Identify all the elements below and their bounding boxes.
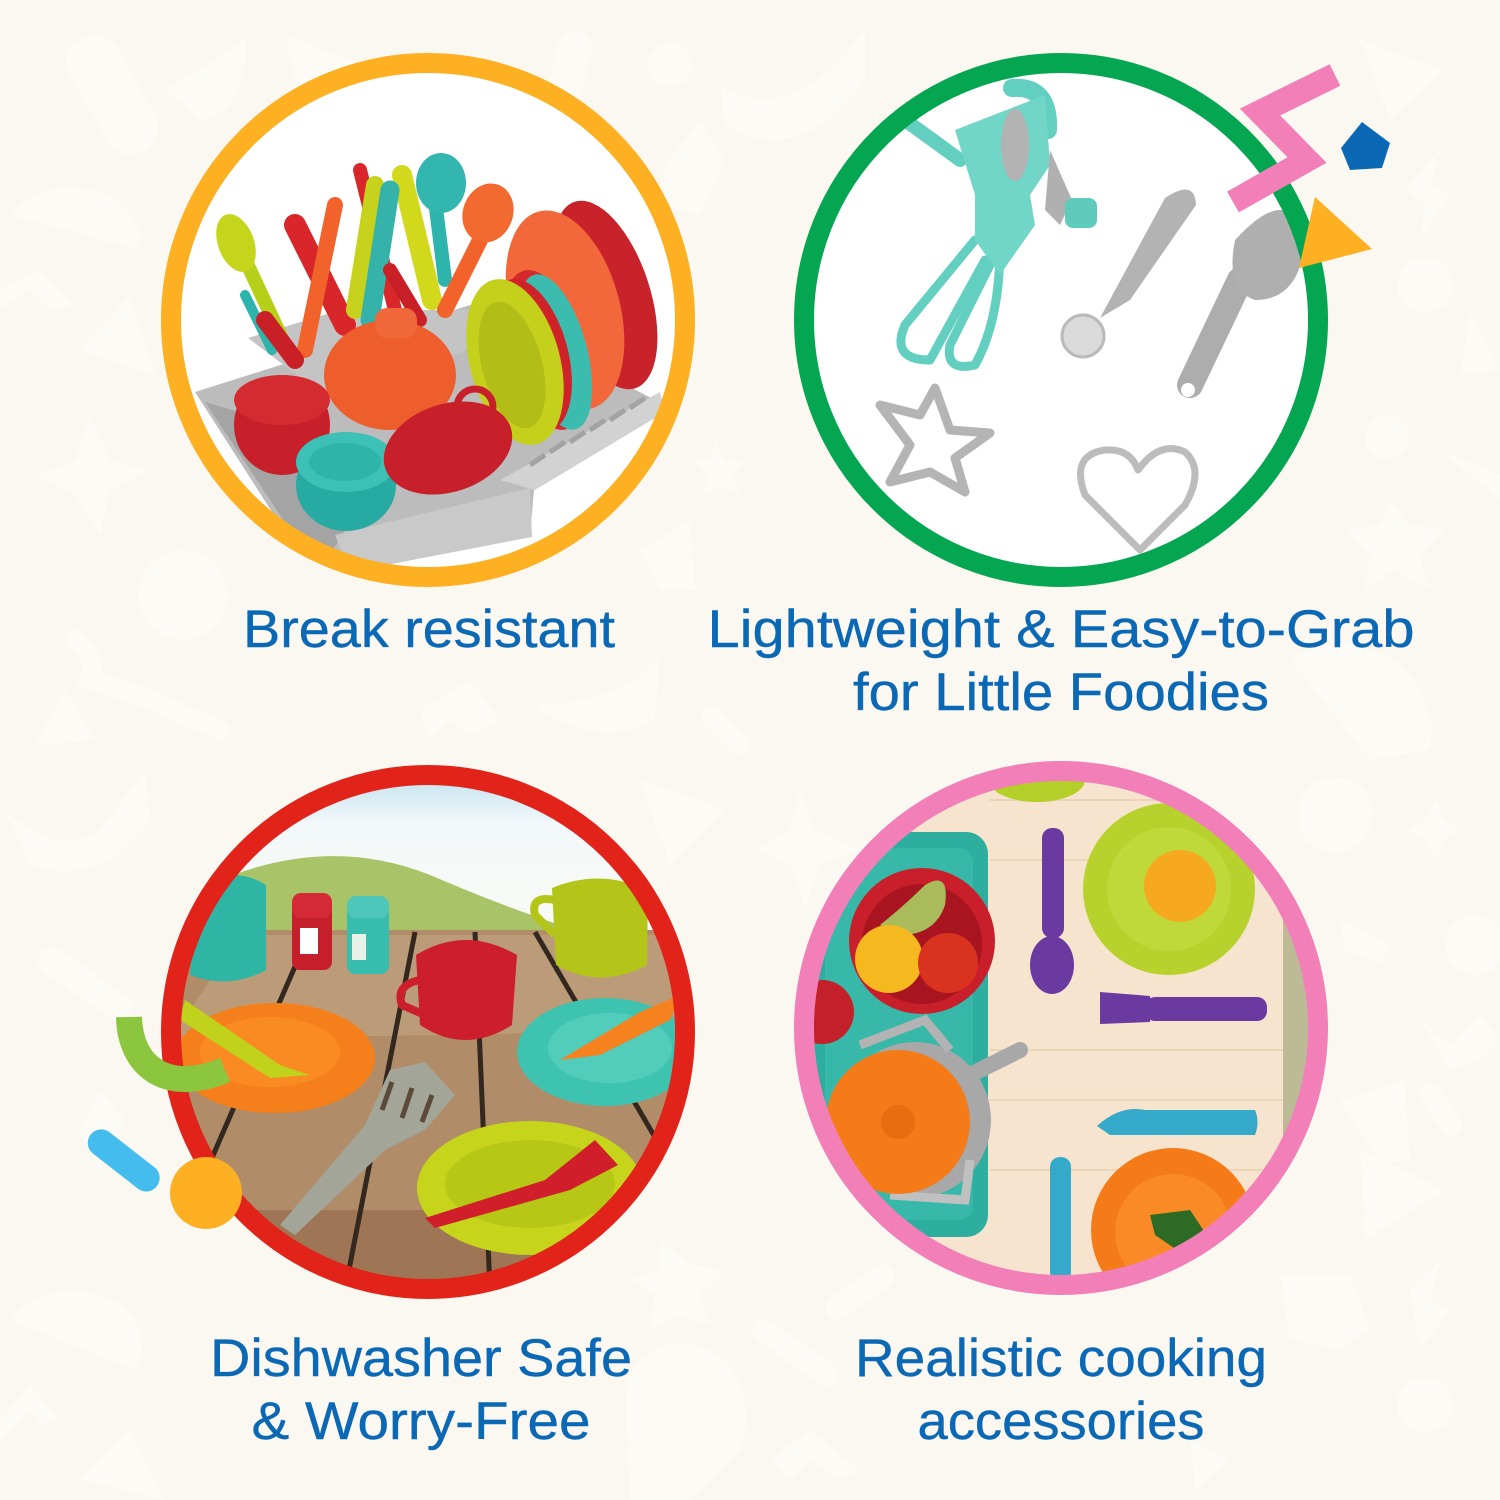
woven mat — [1283, 920, 1308, 1136]
photo: utensils and cookie cutters — [803, 62, 1319, 578]
purple spoon — [1042, 828, 1064, 938]
red mug — [416, 940, 517, 1040]
side bowl — [814, 980, 854, 1044]
spoon — [1190, 280, 1240, 385]
jar — [190, 875, 266, 981]
ring: pink — [804, 771, 1318, 1285]
pot — [874, 1042, 991, 1194]
teal plate — [517, 998, 675, 1106]
photo: dish rack with colourful dishes — [170, 62, 686, 578]
star cutter — [880, 388, 990, 492]
icon: pink zigzag — [1233, 75, 1335, 202]
rack — [195, 305, 665, 568]
plates — [561, 200, 658, 390]
icon: blue pentagon — [1341, 122, 1390, 170]
lime plate — [1083, 803, 1255, 975]
panel: lightweight and easy to grab: for Little Foodies — [853, 663, 1269, 722]
cups — [234, 375, 330, 475]
utensils — [209, 153, 522, 360]
icon: orange circle — [170, 1157, 242, 1229]
panel: realistic cooking accessories — [790, 758, 1330, 1451]
blue spoon — [1050, 1157, 1071, 1282]
lime plate — [417, 1121, 643, 1255]
photo: picnic table — [181, 785, 675, 1279]
orange plate — [175, 1003, 375, 1113]
spatula — [280, 1062, 455, 1235]
panel: realistic cooking accessories: accessories — [918, 1392, 1204, 1451]
mixer — [901, 88, 1048, 366]
photo: tabletop from above — [814, 781, 1308, 1275]
panel: dishwasher safe: & Worry-Free — [252, 1392, 590, 1451]
icon: orange triangle — [1299, 197, 1372, 268]
green mug — [552, 878, 648, 978]
teal tray — [810, 832, 988, 1237]
panel: break resistant — [170, 62, 686, 659]
pastry cutter — [1100, 189, 1196, 318]
purple fork — [1145, 997, 1267, 1021]
bowl and fruit — [849, 868, 995, 1014]
ring: green — [804, 63, 1318, 577]
ring: red — [171, 775, 685, 1289]
caption: Break resistant — [243, 600, 615, 659]
caption: Realistic cooking — [855, 1329, 1267, 1388]
icon: green arc — [129, 1017, 225, 1079]
ring: orange — [171, 63, 685, 577]
caption: Dishwasher Safe — [210, 1329, 632, 1388]
icon: blue pill — [82, 1124, 165, 1197]
caption: Lightweight & Easy-to-Grab — [708, 600, 1414, 659]
knife — [1097, 1109, 1258, 1135]
top plate — [994, 781, 1085, 802]
panel: lightweight and easy to grab — [708, 62, 1414, 722]
shakers — [292, 909, 332, 970]
heart cutter — [1080, 449, 1195, 550]
panel: dishwasher safe — [82, 770, 700, 1451]
orange plate — [1091, 1148, 1246, 1272]
teapot — [324, 320, 456, 430]
